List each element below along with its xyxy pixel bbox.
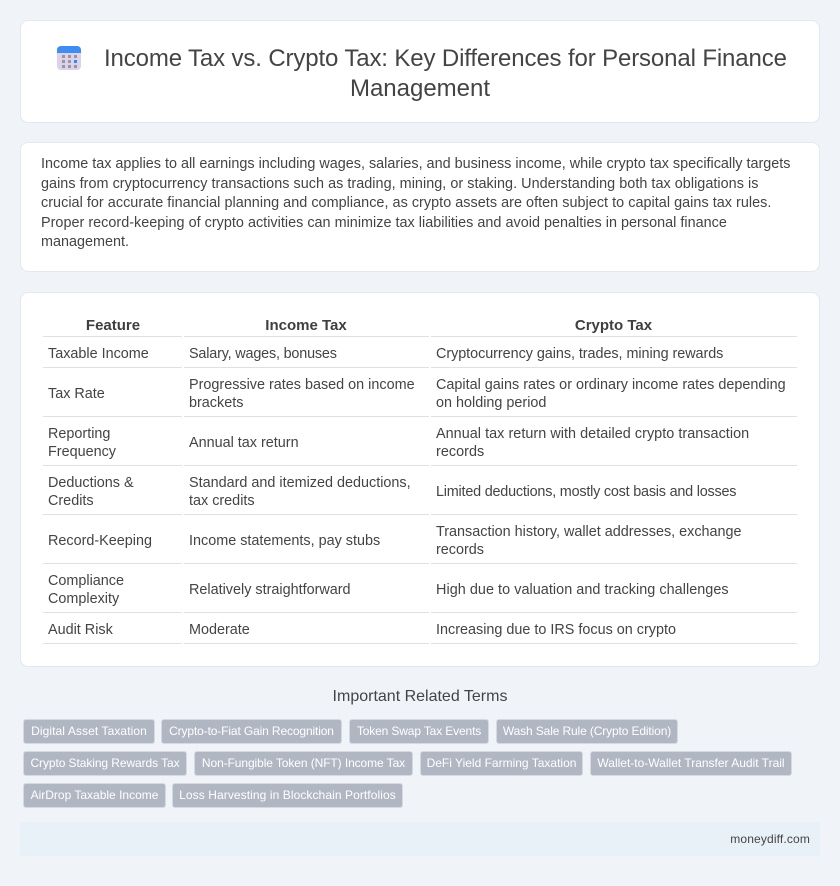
panel: comparison table — [20, 292, 820, 667]
row: Record-Keeping: Record-Keeping — [48, 533, 152, 549]
row: Deductions & Credits: tax credits — [189, 493, 255, 509]
row: Tax Rate — [48, 377, 786, 411]
panel: related term tags: Crypto Staking Rewards Tax — [30, 756, 180, 770]
panel: title header — [20, 20, 820, 123]
row: Record-Keeping: Income statements, pay stubs — [189, 533, 380, 549]
table header: Income Tax — [265, 317, 347, 334]
row: Audit Risk: Increasing due to IRS focus on crypto — [436, 622, 676, 638]
icon: calendar — [57, 46, 81, 70]
row: Reporting Frequency: Reporting — [48, 426, 110, 442]
row: Deductions & Credits: Limited deductions, mostly cost basis and losses — [436, 484, 736, 500]
row: Record-Keeping — [48, 524, 742, 558]
panel: related term tags: Wallet-to-Wallet Transfer Audit Trail — [597, 756, 785, 770]
row: Reporting Frequency: Annual tax return with detailed crypto transaction — [436, 426, 749, 442]
row: Compliance Complexity: Compliance — [48, 573, 124, 589]
heading: important related terms: Important Related Terms — [333, 688, 507, 705]
panel: related term tags: Wash Sale Rule (Crypto Edition) — [503, 724, 671, 738]
row: Reporting Frequency: Frequency — [48, 444, 116, 460]
row: Tax Rate: on holding period — [436, 395, 546, 411]
row: Deductions & Credits: Credits — [48, 493, 94, 509]
row: Deductions & Credits: Deductions & — [48, 475, 134, 491]
panel: related term tags: Crypto-to-Fiat Gain Recognition — [169, 724, 334, 738]
row: Record-Keeping: Transaction history, wallet addresses, exchange — [436, 524, 742, 540]
row: Compliance Complexity — [48, 573, 729, 607]
row: Tax Rate: Progressive rates based on income — [189, 377, 415, 393]
row: Tax Rate: Tax Rate — [48, 386, 105, 402]
row: Compliance Complexity: High due to valuation and tracking challenges — [436, 582, 729, 598]
text block: introduction paragraph: Proper record-keeping of crypto activities can minimize tax liabilities and avoid penalties in personal finance — [41, 214, 727, 230]
row: Compliance Complexity: Complexity — [48, 591, 119, 607]
row: Reporting Frequency: records — [436, 444, 484, 460]
panel: related term tags — [23, 719, 792, 808]
row: Taxable Income: Salary, wages, bonuses — [189, 346, 337, 362]
table header: Feature — [86, 317, 140, 334]
title — [104, 45, 787, 102]
text block: introduction paragraph: gains from cryptocurrency transactions such as trading, mining, or staking. Understanding both tax obligations is — [41, 176, 758, 192]
row: Reporting Frequency: Annual tax return — [189, 435, 299, 451]
text block: introduction paragraph: management. — [41, 234, 129, 250]
title: Management — [350, 75, 490, 102]
panel: related term tags: Token Swap Tax Events — [357, 724, 481, 738]
panel: related term tags: Loss Harvesting in Blockchain Portfolios — [179, 788, 396, 802]
row: Audit Risk: Audit Risk — [48, 622, 113, 638]
text block: introduction paragraph: Income tax applies to all earnings including wages, salaries, and business income, while crypto tax specifically targets — [41, 156, 790, 172]
panel: related term tags: Digital Asset Taxation — [31, 724, 147, 738]
panel: related term tags: DeFi Yield Farming Taxation — [427, 756, 576, 770]
panel: related term tags: AirDrop Taxable Income — [31, 788, 158, 802]
row: Deductions & Credits: Standard and itemized deductions, — [189, 475, 411, 491]
panel: related term tags: Non-Fungible Token (NFT) Income Tax — [202, 756, 405, 770]
row: Reporting Frequency — [48, 426, 749, 460]
row: Tax Rate: Capital gains rates or ordinary income rates depending — [436, 377, 786, 393]
footer source text: moneydiff.com — [730, 832, 810, 846]
row: Taxable Income: Taxable Income — [48, 346, 149, 362]
table header: Crypto Tax — [575, 317, 652, 334]
row: Deductions & Credits — [48, 475, 736, 509]
row: Audit Risk: Moderate — [189, 622, 250, 638]
row: Compliance Complexity: Relatively straightforward — [189, 582, 351, 598]
title: Income Tax vs. Crypto Tax: Key Differences for Personal Finance — [104, 45, 787, 72]
footer bar — [20, 822, 820, 856]
row: Tax Rate: brackets — [189, 395, 243, 411]
text block: introduction paragraph — [41, 156, 790, 250]
row: Taxable Income: Cryptocurrency gains, trades, mining rewards — [436, 346, 723, 362]
text block: introduction paragraph: crucial for accurate financial planning and compliance, as crypto assets are often subject to capital gains tax rules. — [41, 195, 771, 211]
table header — [86, 317, 652, 334]
row: Record-Keeping: records — [436, 542, 484, 558]
row: Taxable Income — [48, 346, 723, 362]
row: Audit Risk — [48, 622, 676, 638]
panel: introduction — [20, 142, 820, 272]
